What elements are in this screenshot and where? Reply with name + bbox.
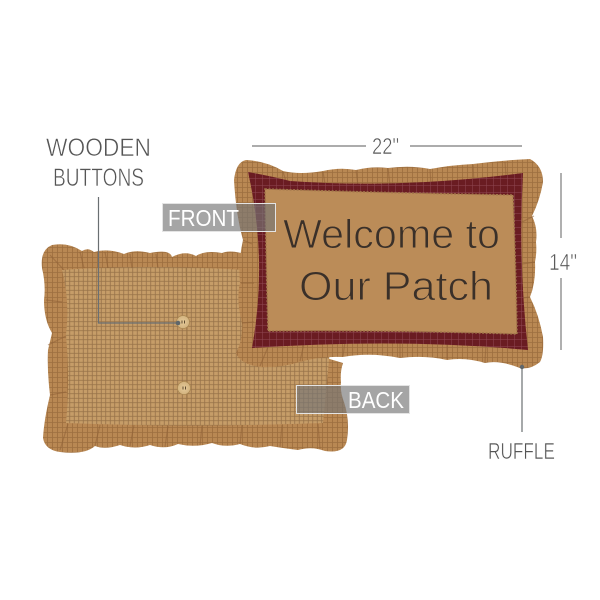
back ruffle folds [46, 252, 320, 450]
wooden buttons heading: BUTTONS [53, 164, 144, 192]
front label [162, 204, 276, 232]
back pillow ruffle [42, 244, 348, 453]
back label box [296, 386, 410, 414]
height line [560, 173, 562, 350]
height value: 14" [549, 249, 577, 275]
front label box [162, 204, 276, 232]
ruffle callout [488, 365, 555, 464]
wooden buttons heading [46, 134, 151, 192]
wooden buttons heading: WOODEN [46, 134, 151, 162]
wooden buttons callout [46, 134, 180, 325]
wooden buttons leader line [98, 197, 180, 325]
sign text line 2: Our Patch [299, 263, 493, 309]
back placket seam [186, 268, 187, 425]
upper wooden button [176, 316, 190, 328]
back label text: BACK [348, 387, 405, 413]
width value: 22" [372, 133, 399, 159]
front pillow ruffle [234, 159, 543, 368]
front label text: FRONT [168, 205, 239, 231]
lower wooden button [178, 382, 190, 394]
width line [252, 145, 522, 147]
ruffle label: RUFFLE [488, 438, 555, 464]
front pillow tan panel [265, 189, 517, 334]
sign text line 1: Welcome to [283, 211, 500, 257]
front pillow red border [248, 172, 528, 350]
ruffle leader line [520, 365, 524, 432]
front ruffle folds [241, 162, 535, 366]
front pillow [234, 159, 543, 368]
back pillow panel [62, 267, 330, 426]
back pillow [42, 244, 348, 453]
back label [296, 386, 410, 414]
